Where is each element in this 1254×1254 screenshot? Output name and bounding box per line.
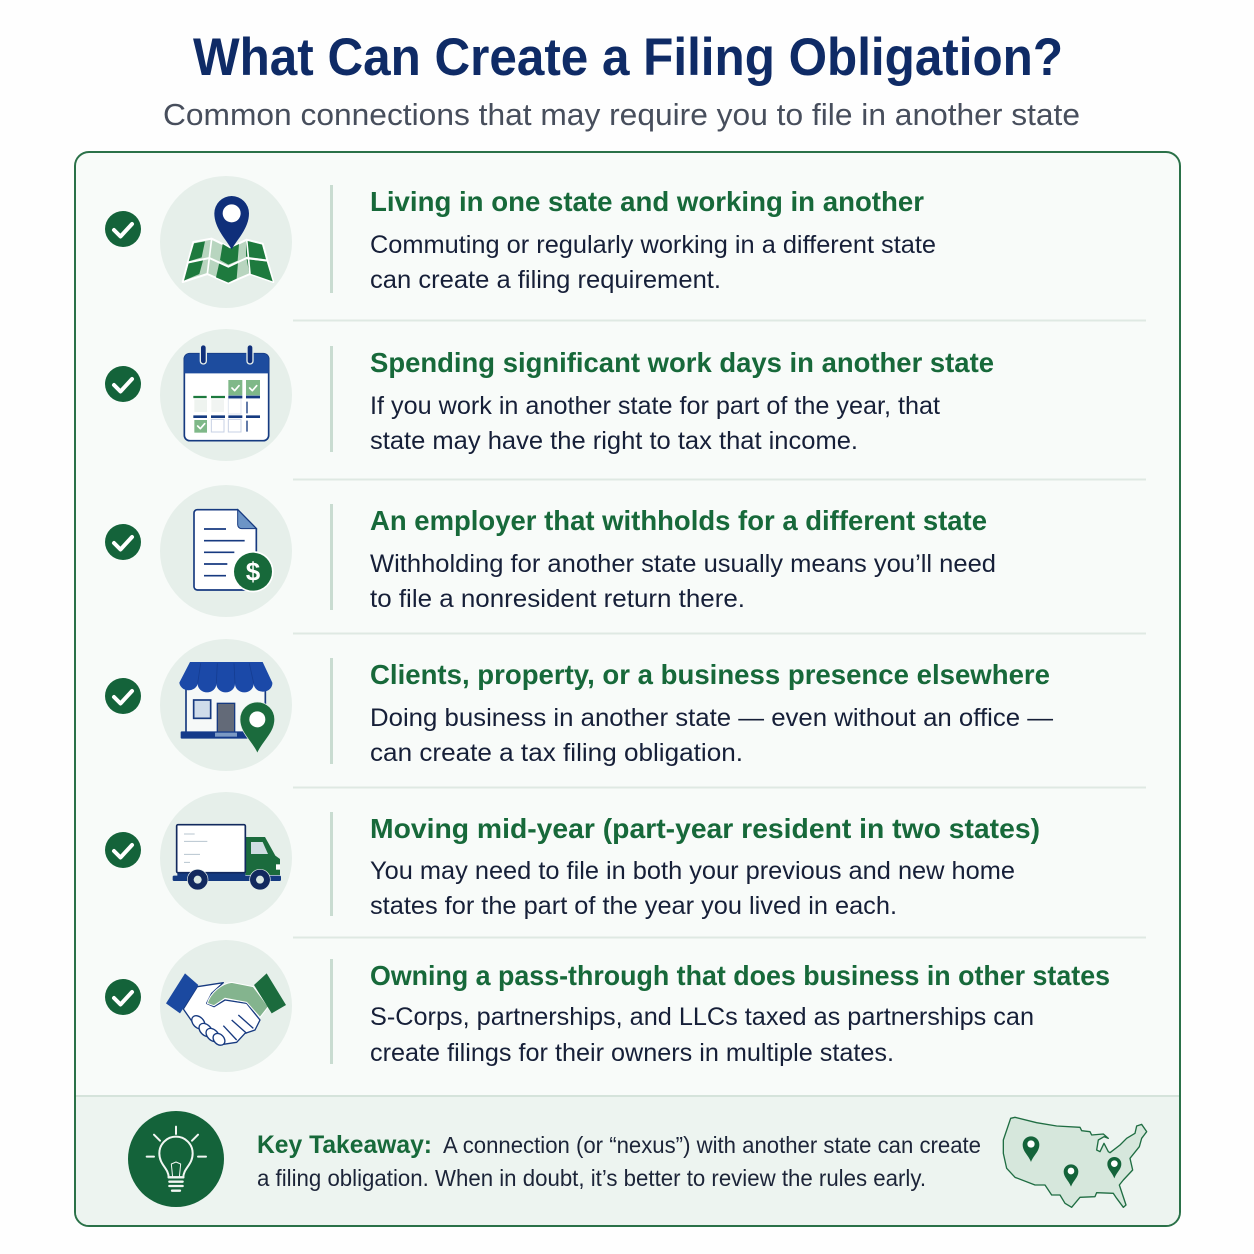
heading: Moving mid-year (part-year resident in two states) — [370, 813, 1040, 844]
description: S-Corps, partnerships, and LLCs taxed as partnerships can — [370, 1003, 1034, 1031]
row 6: pass-through ownership — [105, 940, 1110, 1072]
icon: light bulb — [128, 1111, 224, 1207]
takeaway text: a filing obligation. When in doubt, it’s better to review the rules early. — [257, 1165, 926, 1191]
key takeaway band — [128, 1111, 1147, 1207]
description: Withholding for another state usually means you’ll need — [370, 550, 996, 578]
description — [370, 550, 996, 613]
icon: document with dollar — [160, 485, 292, 617]
heading: Spending significant work days in another state — [370, 347, 994, 378]
title: What Can Create a Filing Obligation? — [193, 28, 1063, 87]
description — [370, 392, 940, 455]
description: can create a tax filing obligation. — [370, 739, 743, 767]
row 3: employer withholding — [105, 485, 996, 617]
description — [370, 231, 936, 294]
description: to file a nonresident return there. — [370, 585, 745, 613]
description — [370, 704, 1053, 767]
description: You may need to file in both your previous and new home — [370, 857, 1015, 885]
icon: moving truck — [160, 792, 292, 924]
description — [370, 857, 1015, 920]
row 2: work days — [105, 329, 994, 461]
check badge — [105, 211, 141, 247]
check badge — [105, 366, 141, 402]
description: states for the part of the year you lived in each. — [370, 892, 897, 920]
heading: Owning a pass-through that does business in other states — [370, 960, 1110, 991]
description: Doing business in another state — even without an office — — [370, 704, 1053, 732]
check badge — [105, 832, 141, 868]
description — [370, 1003, 1034, 1067]
row 5: moving mid-year — [105, 792, 1040, 924]
row 1: living and working — [105, 176, 936, 308]
description: Commuting or regularly working in a different state — [370, 231, 936, 259]
icon: document with dollar: $ — [246, 557, 261, 587]
takeaway text: Key Takeaway: — [257, 1131, 432, 1159]
heading: Living in one state and working in another — [370, 186, 924, 217]
description: state may have the right to tax that income. — [370, 427, 858, 455]
heading: Clients, property, or a business presence elsewhere — [370, 659, 1050, 690]
panel: filing obligations — [75, 152, 1180, 1226]
heading: An employer that withholds for a different state — [370, 505, 987, 536]
check badge — [105, 979, 141, 1015]
description: If you work in another state for part of the year, that — [370, 392, 940, 420]
description: can create a filing requirement. — [370, 266, 721, 294]
icon: US map with pins — [1003, 1117, 1147, 1207]
takeaway text — [257, 1131, 981, 1191]
takeaway text: A connection (or “nexus”) with another state can create — [443, 1132, 981, 1158]
icon: calendar — [160, 329, 292, 461]
description: create filings for their owners in multiple states. — [370, 1039, 894, 1067]
icon: handshake — [160, 940, 292, 1072]
row 4: business presence — [105, 639, 1053, 771]
subtitle: Common connections that may require you to file in another state — [163, 97, 1080, 132]
icon: storefront with pin — [160, 639, 292, 771]
icon: map with pin — [160, 176, 292, 308]
check badge — [105, 678, 141, 714]
check badge — [105, 524, 141, 560]
